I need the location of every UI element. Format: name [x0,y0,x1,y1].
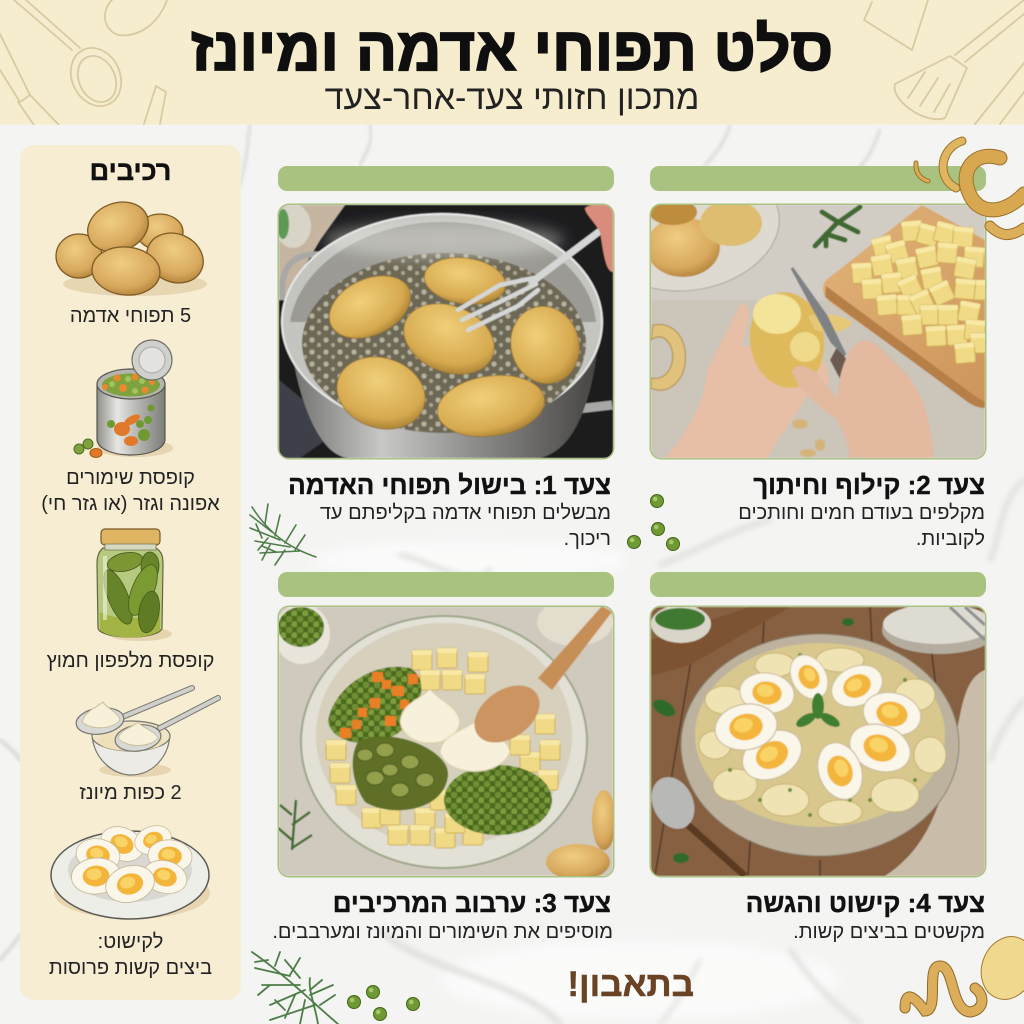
potato outline [105,0,167,35]
step 4 title: צעד 4: קישוט והגשה [746,888,985,918]
boiled potatoes [319,253,588,443]
linen cloth [885,670,985,876]
step 2 text: מקלפים בעודם חמים וחותכים [738,502,985,524]
step 1 text [320,502,611,550]
knife outline left [0,34,59,125]
knife outline right [975,63,1024,124]
icon: dill sprig middle [249,503,317,566]
pot [282,214,612,458]
potato cubes [326,648,560,848]
mayo dollops [400,689,510,772]
step 3 text: מוסיפים את השימורים והמיונז ומערבבים. [272,921,613,943]
hand [585,205,613,272]
panel: step 3 mix [272,572,614,943]
panel: step 4 garnish and serve [650,572,986,943]
step 2 header bar [650,166,986,191]
herb on table [650,618,854,863]
peel on counter [651,324,685,390]
label: eggs garnish: ביצים קשות פרוסות [49,957,212,979]
label: eggs garnish: לקישוט: [98,931,163,953]
step 4 photo [651,607,985,876]
potatoes on counter [546,790,616,880]
title: סלט תפוחי אדמה ומיונז [191,15,833,83]
step 4 header bar [650,572,986,597]
closing message: בתאבון! [567,965,694,1004]
label: pickle jar: קופסת מלפפון חמוץ [47,650,214,672]
peeled potato [744,287,852,393]
pea bowl [274,604,330,664]
step 3 header bar [278,572,614,597]
step 1 title: צעד 1: בישול תפוחי האדמה [288,470,611,500]
label: potatoes: 5 תפוחי אדמה [70,305,191,327]
step 3 photo [279,607,613,876]
knife [792,268,845,355]
label: mayonnaise: 2 כפות מיונז [79,782,182,804]
herb sprig [815,207,860,246]
header band [0,0,1024,125]
plate of potatoes [591,151,789,305]
label: canned vegetables: קופסת שימורים [66,467,195,489]
label: canned vegetables: אפונה וגזר (או גזר חי) [41,493,220,515]
step 3 title: צעד 3: ערבוב המרכיבים [333,888,611,918]
spatula outline [895,0,1024,119]
cutting board and herbs [651,605,790,676]
pickle slices [353,736,448,810]
mayo jar bowl [537,598,613,646]
subtitle: מתכון חזותי צעד-אחר-צעד [325,79,699,117]
salad texture [699,648,946,824]
right hand [792,340,933,458]
knife handle behind hand [830,345,855,398]
panel: step 2 peel and dice [650,166,986,550]
icon: potato peel top right [913,136,1024,240]
label: eggs garnish [49,931,301,1020]
step 2 text: לקוביות. [916,528,985,550]
stacked plates [882,604,998,654]
icon: can of peas and carrots [74,339,173,458]
icon: peas centre [249,192,1016,1014]
glass bowl [301,616,587,868]
step 1 photo [279,205,613,458]
ingredients heading: רכיבים [90,156,171,186]
icon: plate of sliced eggs [50,825,210,920]
left hand [665,304,830,458]
step 2 text [738,502,985,550]
step 1 text: מבשלים תפוחי אדמה בקליפתם עד [320,502,611,524]
egg slices [711,648,925,806]
peas pile right [444,765,552,835]
step 1 text: ריכוך. [564,528,611,550]
icon: potatoes [55,201,207,296]
carrot outline [144,86,166,124]
panel: ingredients [20,145,241,1000]
step 1 header bar [278,166,614,191]
step 2 title: צעד 2: קילוף וחיתוך [753,470,985,500]
grater outline [864,0,928,50]
step 4 text: מקשטים בביצים קשות. [793,921,985,943]
label: canned vegetables [41,467,220,515]
parsley garnish [794,693,842,730]
serving spoon [643,770,745,876]
icon: peas bottom [347,985,420,1021]
dill [278,800,312,850]
salad bowl [681,634,959,856]
icon: mayonnaise spoons and bowl [76,685,221,777]
wooden spoon [464,606,612,754]
icon: pickle jar [96,528,172,641]
fork [458,222,612,330]
step 2 photo [651,205,985,458]
potato scraps [792,419,825,457]
cutting board with cubes [823,205,992,408]
spoon outline left [14,0,130,114]
icon: dill sprig bottom [251,951,339,1024]
icon: potato and peel bottom right [900,936,1024,1018]
panel: step 1 boil [278,150,992,550]
peas and carrots pile [328,667,421,743]
